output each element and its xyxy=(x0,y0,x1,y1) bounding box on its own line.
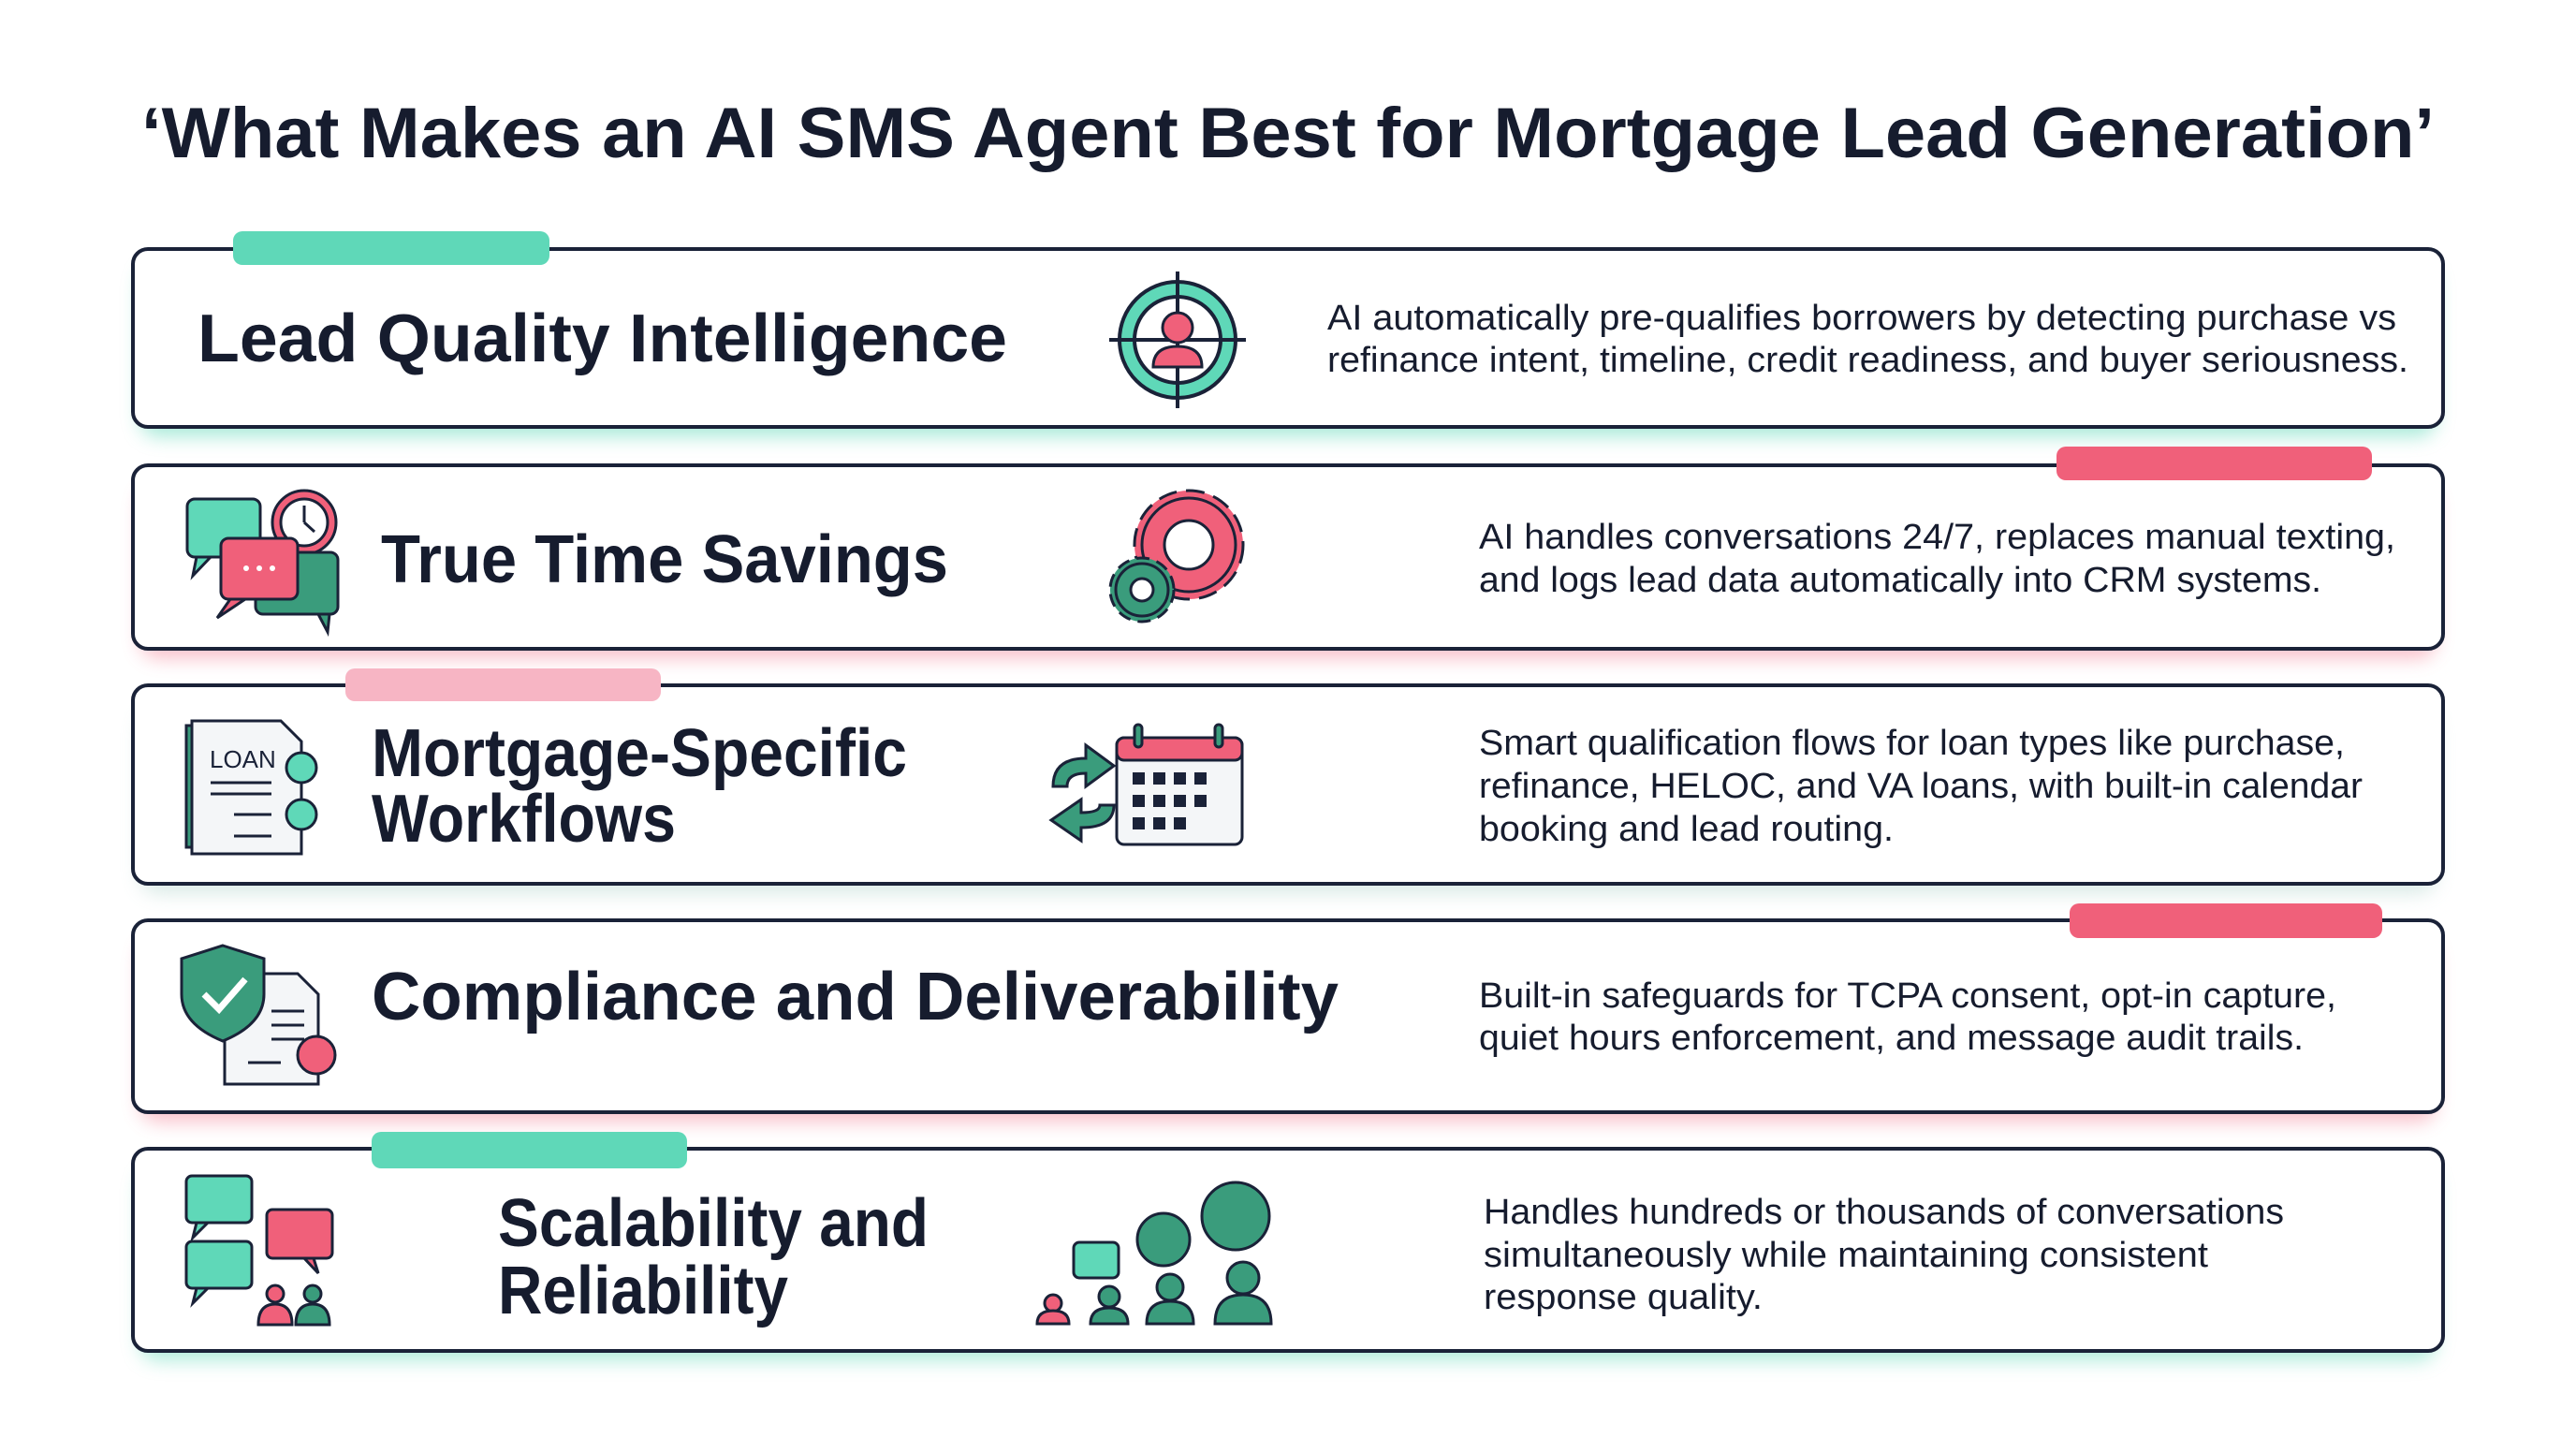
description: workflows: Smart qualification flows for loan types like purchase, xyxy=(1479,724,2345,763)
description: lead quality: AI automatically pre-qualifies borrowers by detecting purchase vs xyxy=(1327,299,2396,338)
heading: lead quality: Lead Quality Intelligence xyxy=(198,301,1007,376)
heading: mortgage workflows: Mortgage-Specific xyxy=(372,716,907,791)
description: workflows xyxy=(1479,724,2363,849)
heading: mortgage workflows: Workflows xyxy=(372,782,676,857)
panel: mortgage-specific workflows xyxy=(133,668,2443,893)
panel: lead quality intelligence xyxy=(133,231,2443,436)
description: compliance: quiet hours enforcement, and message audit trails. xyxy=(1479,1019,2304,1058)
description: scalability: Handles hundreds or thousands of conversations xyxy=(1484,1193,2284,1232)
description: scalability: simultaneously while maintaining consistent xyxy=(1484,1236,2208,1275)
heading: mortgage workflows xyxy=(372,716,907,857)
heading: scalability: Reliability xyxy=(498,1254,788,1328)
heading: compliance: Compliance and Deliverability xyxy=(372,960,1339,1034)
description: lead quality: refinance intent, timeline, credit readiness, and buyer seriousness. xyxy=(1327,341,2408,380)
heading: time savings: True Time Savings xyxy=(381,522,948,597)
description: time savings: and logs lead data automatically into CRM systems. xyxy=(1479,561,2321,600)
panel: compliance and deliverability xyxy=(133,903,2443,1122)
icon: target person xyxy=(1109,271,1246,408)
icon: calendar arrows xyxy=(1051,725,1242,844)
icon: loan document: LOAN xyxy=(210,745,276,773)
panel: true time savings xyxy=(133,447,2443,658)
icon: chats and people xyxy=(186,1176,332,1325)
panel: scalability and reliability xyxy=(133,1132,2443,1360)
heading: scalability xyxy=(498,1186,929,1328)
description: scalability xyxy=(1484,1193,2284,1317)
description: time savings xyxy=(1479,518,2395,600)
description: workflows: booking and lead routing. xyxy=(1479,810,1894,849)
title: ‘What Makes an AI SMS Agent Best for Mortgage Lead Generation’ xyxy=(141,94,2435,173)
description: scalability: response quality. xyxy=(1484,1278,1763,1317)
icon: shield document xyxy=(182,946,335,1084)
icon: chat clock xyxy=(187,491,338,632)
icon: loan document xyxy=(186,721,316,854)
description: time savings: AI handles conversations 24/7, replaces manual texting, xyxy=(1479,518,2395,557)
description: compliance xyxy=(1479,976,2336,1058)
description: compliance: Built-in safeguards for TCPA consent, opt-in capture, xyxy=(1479,976,2336,1016)
icon: growing crowd with speech bubbles xyxy=(1037,1182,1271,1324)
description: lead quality xyxy=(1327,299,2408,380)
heading: scalability: Scalability and xyxy=(498,1186,929,1261)
description: workflows: refinance, HELOC, and VA loans, with built-in calendar xyxy=(1479,767,2363,806)
icon: gears xyxy=(1110,491,1243,622)
